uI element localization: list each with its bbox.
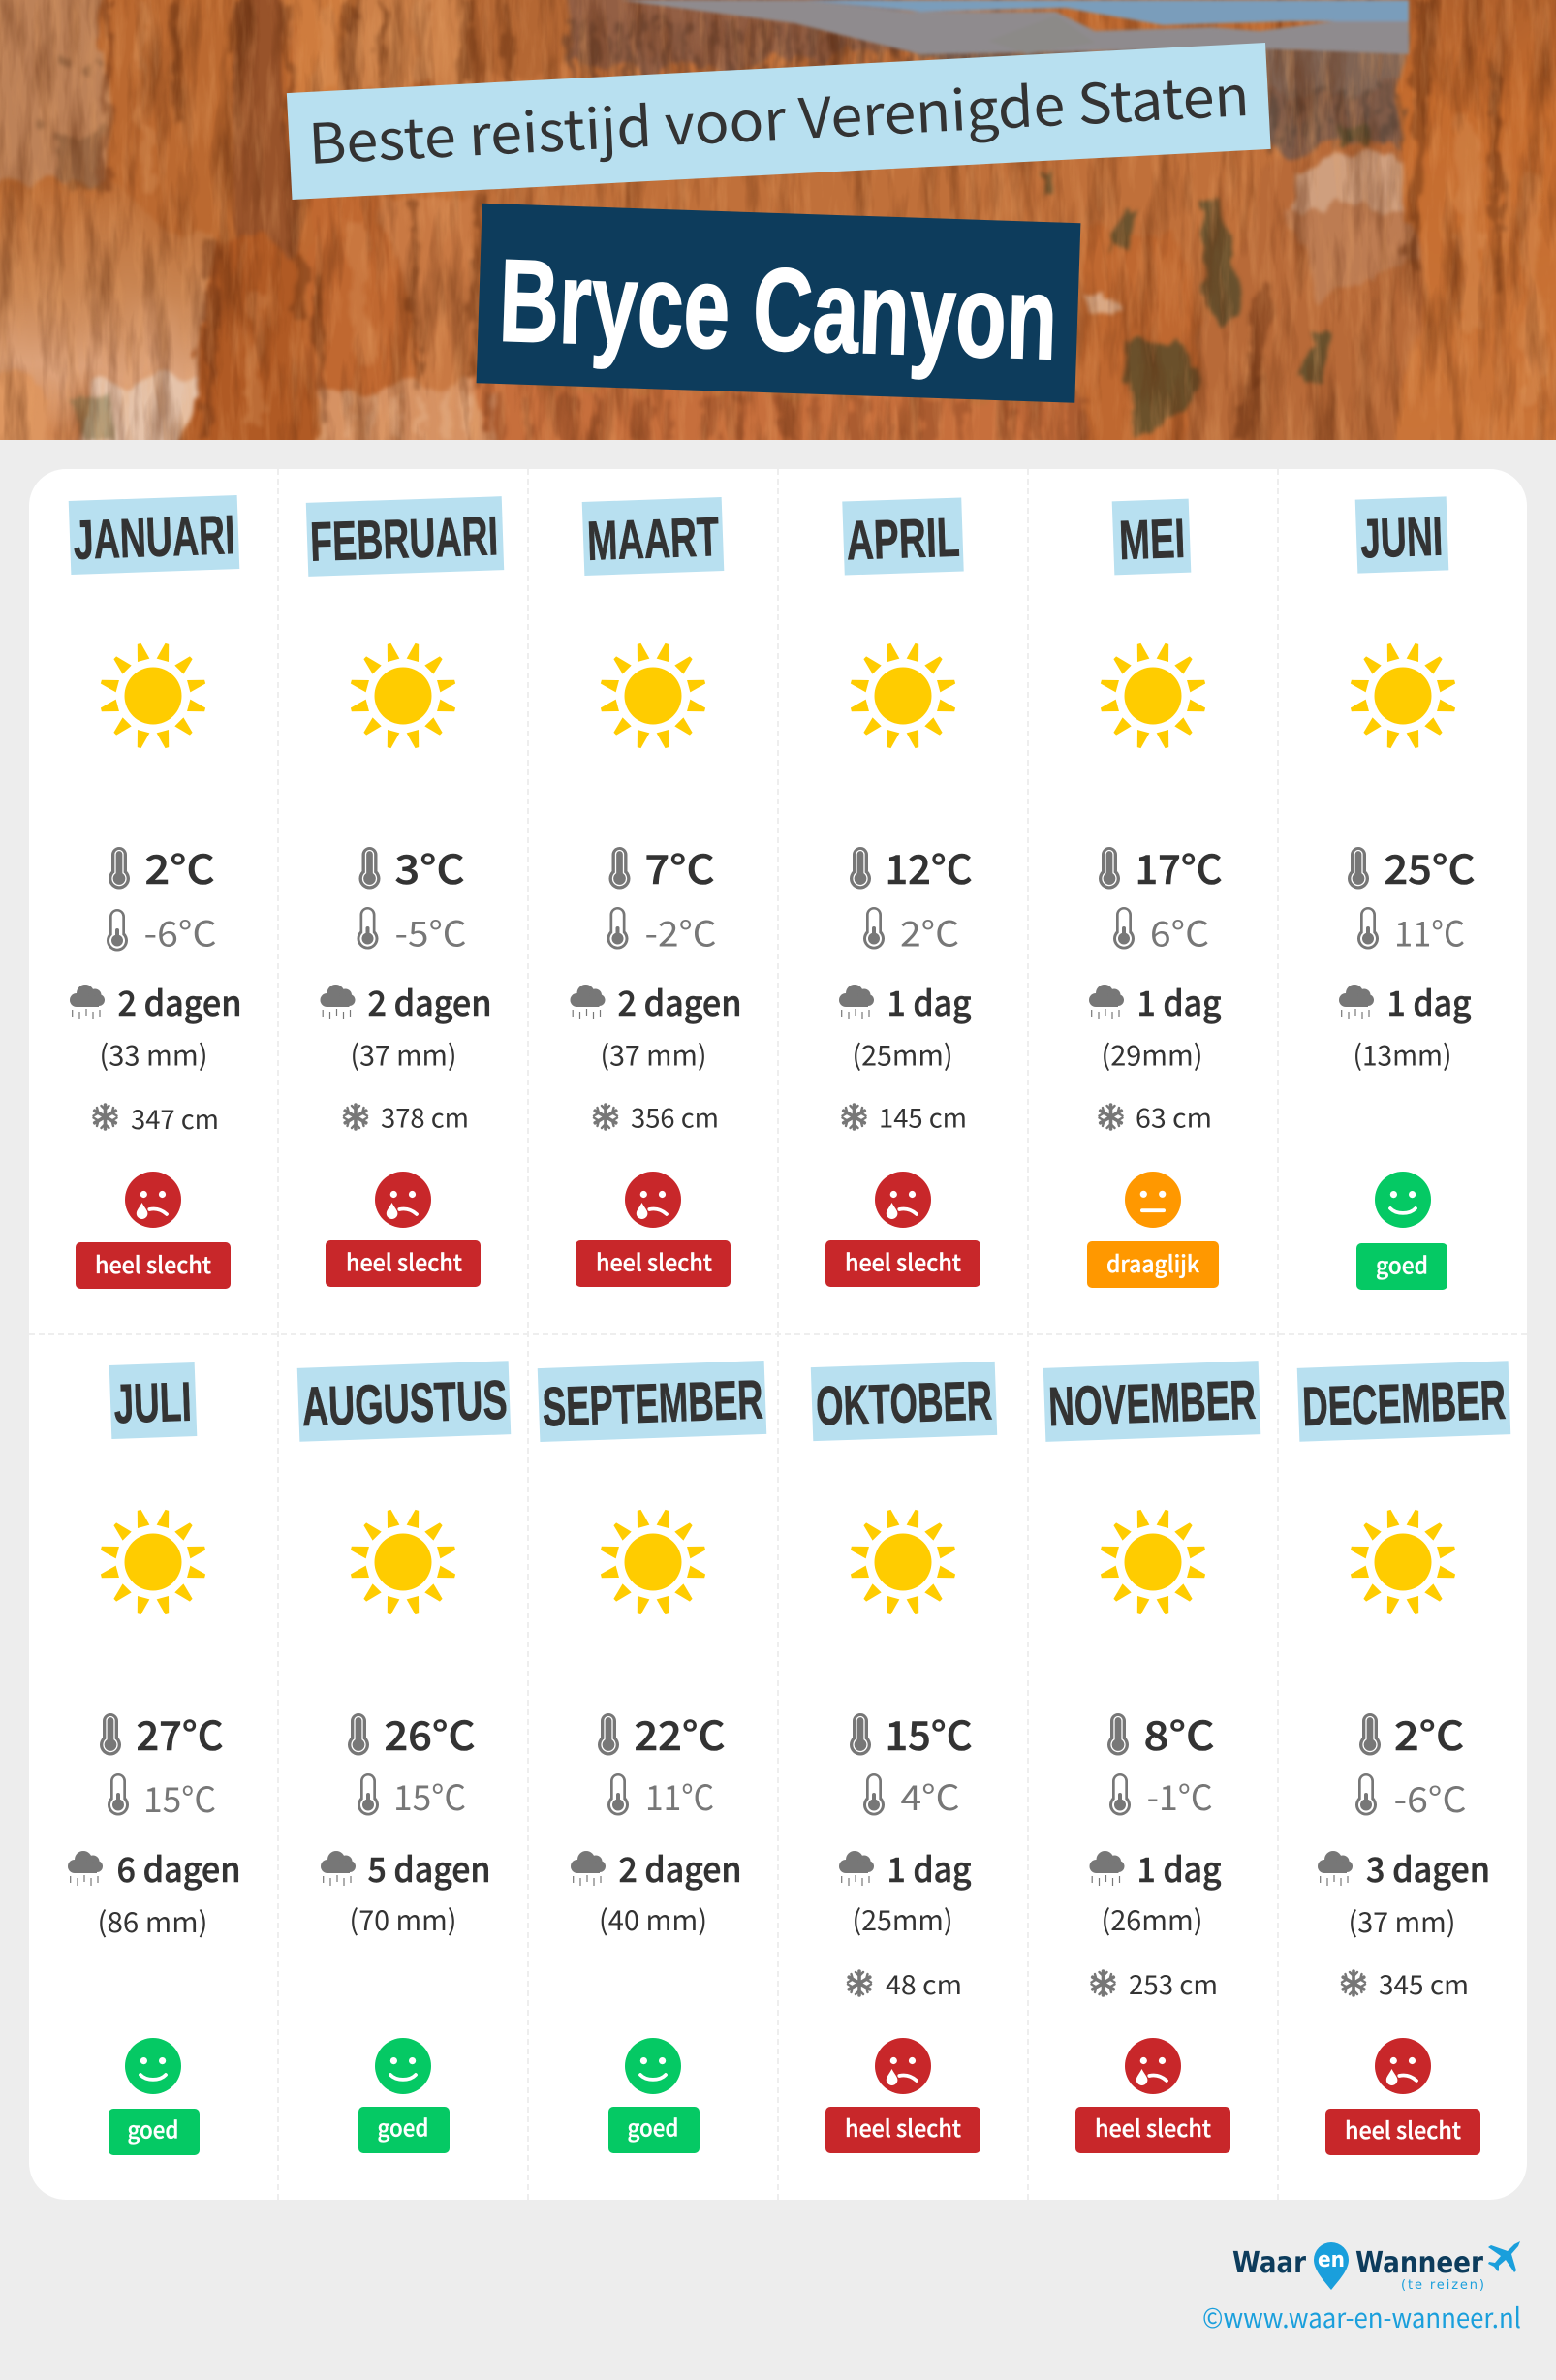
rating badge bbox=[608, 2107, 700, 2153]
heading: september bbox=[538, 1361, 766, 1442]
high temperature: 3°C bbox=[395, 837, 465, 895]
rain days: 5 dagen bbox=[368, 1843, 490, 1893]
low temperature: -5°C bbox=[395, 907, 467, 957]
icon: happy face bbox=[1375, 1172, 1431, 1228]
icon: sun bbox=[350, 1509, 456, 1615]
high temperature: 2°C bbox=[1394, 1704, 1464, 1762]
icon: thermometer high bbox=[358, 847, 380, 890]
icon: thermometer low bbox=[1113, 907, 1135, 950]
icon: thermometer high bbox=[850, 847, 871, 890]
icon: rain cloud bbox=[571, 1851, 606, 1886]
high temperature: 17°C bbox=[1136, 837, 1223, 895]
rain days: 2 dagen bbox=[118, 977, 242, 1026]
logo: Waar en Wanneer: (te reizen) bbox=[1401, 2278, 1484, 2293]
low temperature: 15°C bbox=[393, 1770, 466, 1821]
rating badge: goed bbox=[1376, 1246, 1428, 1281]
icon: snowflake bbox=[344, 1105, 367, 1129]
icon: thermometer low bbox=[1357, 907, 1379, 950]
header photo: Bryce Canyon rock formations bbox=[0, 0, 1556, 440]
rain days: 2 dagen bbox=[618, 1843, 742, 1893]
icon: crying face bbox=[625, 1172, 681, 1228]
panel: juli bbox=[68, 1362, 240, 2155]
rating badge bbox=[1325, 2109, 1480, 2155]
rainfall: (70 mm) bbox=[349, 1898, 457, 1939]
dark spots on left rock bbox=[33, 52, 102, 191]
icon: snowflake bbox=[843, 1105, 866, 1129]
heading: november: NOVEMBER bbox=[1047, 1369, 1257, 1438]
rain days: 1 dag bbox=[887, 977, 971, 1026]
heading: juli bbox=[109, 1362, 197, 1439]
rating badge bbox=[326, 1240, 481, 1287]
heading: augustus bbox=[297, 1361, 511, 1442]
low temperature: 4°C bbox=[901, 1770, 959, 1821]
icon: thermometer high bbox=[1099, 847, 1120, 890]
icon: thermometer high bbox=[109, 847, 130, 890]
icon: sun bbox=[1350, 642, 1456, 749]
stripes: dense hoodoo columns bbox=[566, 18, 920, 82]
rainfall: (33 mm) bbox=[99, 1034, 207, 1075]
low temperature: -6°C bbox=[1393, 1772, 1467, 1823]
rating badge: heel slecht bbox=[1345, 2112, 1461, 2145]
icon: thermometer high bbox=[348, 1713, 369, 1756]
rain days: 6 dagen bbox=[116, 1843, 240, 1893]
rating badge bbox=[1087, 1241, 1219, 1288]
icon: sun bbox=[850, 642, 956, 749]
heading: juli: JULI bbox=[112, 1371, 193, 1435]
icon: sun bbox=[100, 1509, 206, 1615]
rating badge: heel slecht bbox=[1095, 2110, 1211, 2144]
rainfall: (37 mm) bbox=[351, 1034, 457, 1075]
icon: crying face bbox=[1125, 2038, 1181, 2094]
icon: snowflake bbox=[1342, 1971, 1365, 1995]
high temperature: 8°C bbox=[1143, 1704, 1215, 1762]
low temperature: 6°C bbox=[1150, 907, 1209, 957]
rating badge: goed bbox=[628, 2109, 678, 2144]
icon: thermometer high bbox=[1107, 1713, 1129, 1756]
panel: augustus bbox=[297, 1361, 511, 2153]
icon: snowflake bbox=[1091, 1971, 1114, 1995]
panel: oktober bbox=[811, 1362, 997, 2153]
snowfall: 356 cm bbox=[631, 1097, 719, 1135]
icon: rain cloud bbox=[321, 1851, 356, 1886]
high temperature: 15°C bbox=[886, 1704, 973, 1762]
rain days: 1 dag bbox=[1137, 977, 1221, 1026]
high temperature: 12°C bbox=[886, 837, 973, 895]
rainfall: (37 mm) bbox=[1349, 1900, 1455, 1941]
logo: Waar en Wanneer: en bbox=[1318, 2248, 1345, 2272]
rating badge bbox=[109, 2109, 200, 2155]
footer website url: ©www.waar-en-wanneer.nl bbox=[1202, 2298, 1521, 2336]
heading: maart bbox=[582, 497, 724, 576]
high temperature: 22°C bbox=[634, 1704, 725, 1762]
low temperature: 15°C bbox=[143, 1772, 216, 1823]
panel: april bbox=[825, 497, 980, 1287]
panel: februari bbox=[306, 496, 504, 1287]
icon: crying face bbox=[125, 1172, 181, 1228]
icon: happy face bbox=[375, 2038, 431, 2094]
rainfall: (13mm) bbox=[1353, 1034, 1451, 1075]
heading: oktober: OKTOBER bbox=[815, 1369, 993, 1437]
icon: snowflake bbox=[848, 1971, 871, 1995]
icon: map pin bbox=[1314, 2242, 1349, 2290]
panel: januari bbox=[69, 495, 242, 1289]
panel: juni bbox=[1339, 496, 1475, 1290]
icon: rain cloud bbox=[839, 1851, 874, 1886]
icon: crying face bbox=[1375, 2038, 1431, 2094]
rating badge: heel slecht bbox=[95, 1246, 211, 1280]
icon: thermometer low bbox=[107, 909, 128, 952]
icon: thermometer low bbox=[863, 907, 885, 950]
icon: airplane bbox=[1488, 2241, 1520, 2272]
icon: rain cloud bbox=[570, 985, 605, 1019]
icon: snowflake bbox=[1099, 1105, 1122, 1129]
rain days: 1 dag bbox=[1387, 977, 1471, 1026]
icon: thermometer low bbox=[607, 907, 628, 950]
heading: januari: JANUARI bbox=[73, 504, 236, 572]
heading: april: APRIL bbox=[846, 507, 961, 572]
icon: thermometer high bbox=[608, 847, 630, 890]
rainfall: (86 mm) bbox=[97, 1900, 207, 1941]
panel: november bbox=[1043, 1361, 1260, 2153]
rainfall: (25mm) bbox=[853, 1034, 953, 1075]
snowfall: 253 cm bbox=[1129, 1964, 1218, 2002]
snowfall: 347 cm bbox=[131, 1099, 219, 1137]
logo: Waar en Wanneer bbox=[1232, 2241, 1520, 2293]
icon: thermometer low bbox=[357, 907, 378, 950]
high temperature: 26°C bbox=[384, 1704, 475, 1762]
logo: Waar en Wanneer: Waar bbox=[1232, 2246, 1306, 2280]
icon: rain cloud bbox=[1318, 1851, 1353, 1886]
low temperature: 11°C bbox=[1394, 907, 1465, 957]
logo: Waar en Wanneer: Wanneer bbox=[1355, 2246, 1483, 2280]
rating badge: heel slecht bbox=[845, 1244, 961, 1277]
title banner: subtitle: Beste reistijd voor Verenigde Staten bbox=[306, 52, 1251, 180]
rain days: 1 dag bbox=[887, 1843, 971, 1893]
icon: thermometer high bbox=[598, 1713, 619, 1756]
heading: juni bbox=[1355, 496, 1448, 574]
icon: sun bbox=[1100, 642, 1206, 749]
icon: thermometer low bbox=[1355, 1773, 1377, 1816]
low temperature: -1°C bbox=[1147, 1770, 1213, 1821]
heading: juni: JUNI bbox=[1359, 506, 1444, 570]
heading: augustus: AUGUSTUS bbox=[301, 1369, 509, 1438]
heading: maart: MAART bbox=[586, 506, 720, 573]
title banner: Bryce Canyon bbox=[477, 204, 1080, 403]
snowfall: 63 cm bbox=[1136, 1097, 1212, 1135]
rating badge bbox=[825, 2107, 980, 2153]
rainfall: (37 mm) bbox=[601, 1034, 707, 1075]
panel: mei bbox=[1087, 499, 1223, 1288]
snowfall: 145 cm bbox=[879, 1097, 967, 1135]
icon: neutral face bbox=[1125, 1172, 1181, 1228]
panel: calendar card bbox=[29, 469, 1527, 2200]
icon: sun bbox=[600, 1509, 706, 1615]
rating badge bbox=[1075, 2107, 1230, 2153]
rating badge bbox=[76, 1242, 231, 1289]
icon: crying face bbox=[375, 1172, 431, 1228]
rating badge bbox=[576, 1240, 731, 1287]
rain days: 3 dagen bbox=[1366, 1843, 1490, 1893]
stripes: pillar crevices bbox=[101, 0, 1504, 440]
heading: april bbox=[842, 497, 964, 576]
panel: september bbox=[538, 1361, 766, 2153]
rain days: 2 dagen bbox=[618, 977, 742, 1026]
rating badge: draaglijk bbox=[1106, 1245, 1199, 1279]
snowfall: 48 cm bbox=[886, 1964, 962, 2002]
icon: thermometer low bbox=[358, 1773, 379, 1816]
heading: januari bbox=[69, 495, 239, 575]
rating badge bbox=[1356, 1243, 1447, 1290]
rating badge bbox=[825, 1240, 980, 1287]
rainfall: (26mm) bbox=[1101, 1898, 1203, 1939]
icon: thermometer low bbox=[1109, 1773, 1131, 1816]
rating badge bbox=[358, 2107, 450, 2153]
snowfall: 345 cm bbox=[1379, 1964, 1469, 2002]
icon: rain cloud bbox=[1339, 985, 1374, 1019]
panel: december bbox=[1297, 1361, 1510, 2155]
low temperature: 2°C bbox=[900, 907, 959, 957]
icon: sun bbox=[350, 642, 456, 749]
rating badge: heel slecht bbox=[596, 1244, 712, 1277]
icon: thermometer high bbox=[1359, 1713, 1381, 1756]
heading: mei: MEI bbox=[1118, 508, 1186, 572]
high temperature: 27°C bbox=[136, 1704, 223, 1762]
icon: sun bbox=[600, 642, 706, 749]
high temperature: 25°C bbox=[1384, 837, 1475, 895]
low temperature: -6°C bbox=[143, 907, 217, 957]
icon: sun bbox=[1350, 1509, 1456, 1615]
snowfall: 378 cm bbox=[381, 1097, 469, 1135]
icon: thermometer high bbox=[100, 1713, 121, 1756]
icon: rain cloud bbox=[70, 985, 105, 1019]
icon: thermometer low bbox=[607, 1773, 629, 1816]
icon: snowflake bbox=[594, 1105, 617, 1129]
heading: februari bbox=[306, 496, 504, 577]
icon: crying face bbox=[875, 1172, 931, 1228]
rainfall: (29mm) bbox=[1101, 1034, 1203, 1075]
rating badge: heel slecht bbox=[346, 1244, 462, 1277]
title banner: Bryce Canyon: Bryce Canyon bbox=[497, 234, 1059, 385]
icon: thermometer low bbox=[863, 1773, 885, 1816]
icon: happy face bbox=[625, 2038, 681, 2094]
high temperature: 2°C bbox=[145, 837, 215, 895]
icon: rain cloud bbox=[1089, 985, 1124, 1019]
heading: februari: FEBRUARI bbox=[309, 505, 499, 574]
icon: happy face bbox=[125, 2038, 181, 2094]
rating badge: goed bbox=[128, 2111, 178, 2145]
icon: rain cloud bbox=[320, 985, 355, 1019]
icon: thermometer high bbox=[850, 1713, 871, 1756]
icon: thermometer low bbox=[108, 1773, 129, 1816]
low temperature: -2°C bbox=[645, 907, 717, 957]
trees bbox=[1042, 126, 1368, 440]
heading: oktober bbox=[811, 1362, 997, 1441]
icon: snowflake bbox=[93, 1105, 116, 1129]
heading: september: SEPTEMBER bbox=[542, 1369, 764, 1438]
icon: sun bbox=[1100, 1509, 1206, 1615]
rain days: 1 dag bbox=[1137, 1843, 1221, 1893]
low temperature: 11°C bbox=[645, 1770, 714, 1821]
rain days: 2 dagen bbox=[368, 977, 492, 1026]
icon: rain cloud bbox=[68, 1851, 103, 1886]
rainfall: (40 mm) bbox=[599, 1898, 707, 1939]
icon: rain cloud bbox=[1089, 1851, 1124, 1886]
icon: sun bbox=[850, 1509, 956, 1615]
rating badge: heel slecht bbox=[845, 2110, 961, 2144]
panel: maart bbox=[570, 497, 742, 1287]
rainfall: (25mm) bbox=[853, 1898, 953, 1939]
heading: november bbox=[1043, 1361, 1260, 1442]
high temperature: 7°C bbox=[645, 837, 715, 895]
icon: crying face bbox=[875, 2038, 931, 2094]
icon: thermometer high bbox=[1348, 847, 1369, 890]
icon: sun bbox=[100, 642, 206, 749]
icon: rain cloud bbox=[839, 985, 874, 1019]
heading: mei bbox=[1112, 499, 1191, 575]
rating badge: goed bbox=[378, 2109, 428, 2144]
